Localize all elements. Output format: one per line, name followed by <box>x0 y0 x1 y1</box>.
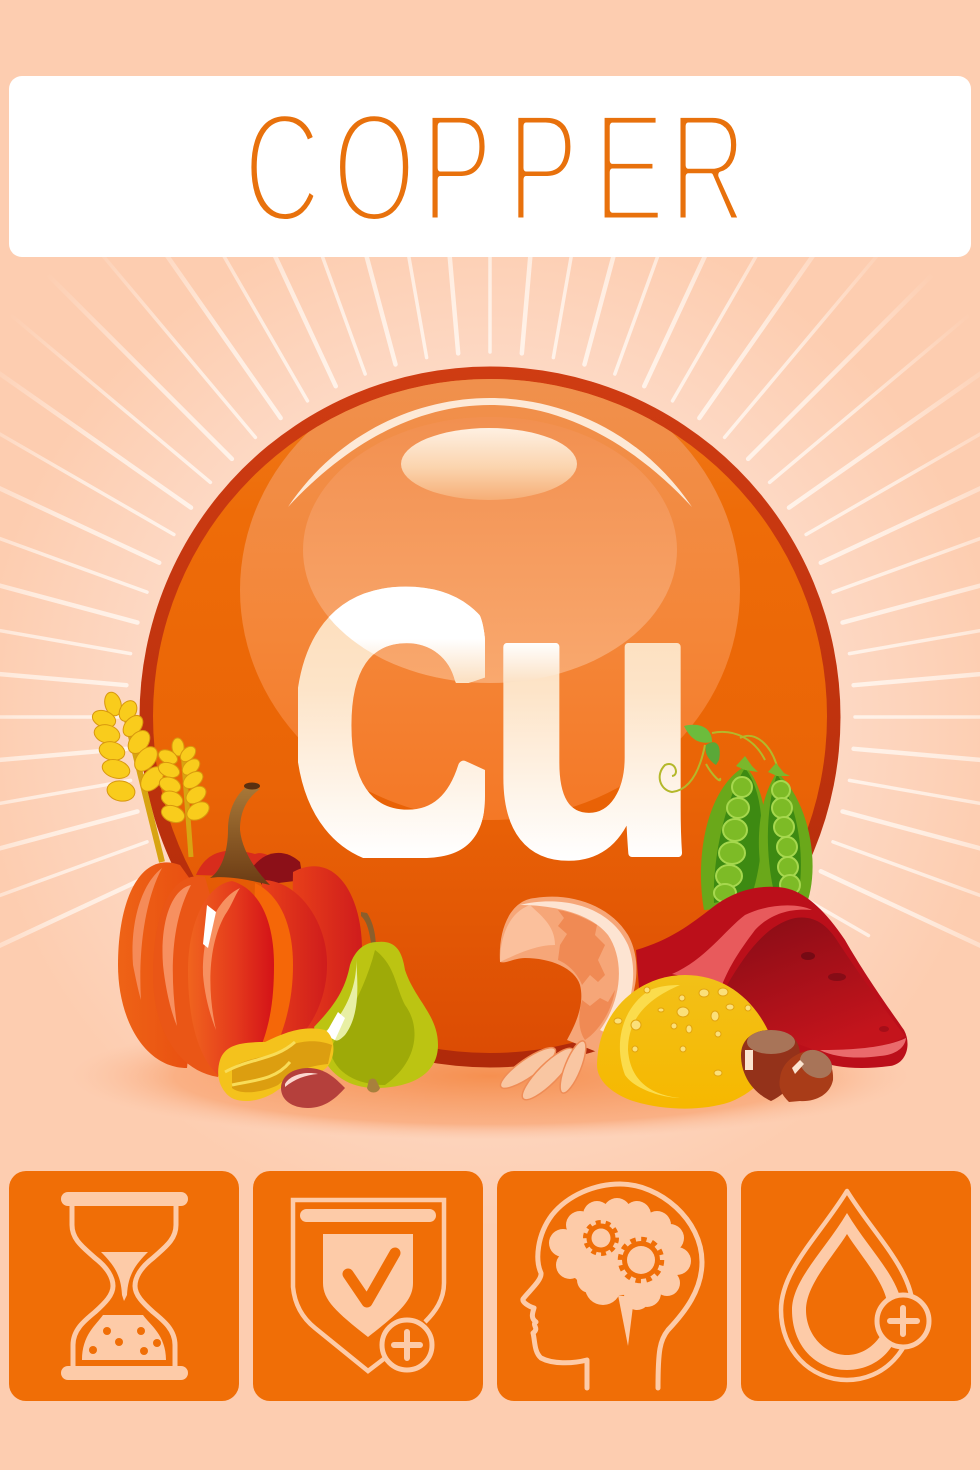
element symbol Cu <box>298 586 682 861</box>
title panel <box>9 76 971 257</box>
card: hourglass (anti-aging) <box>9 1171 239 1401</box>
icon: head with brain and gears <box>523 1184 702 1388</box>
food: sesame bun <box>597 975 773 1109</box>
title: COPPER <box>244 81 747 255</box>
floor shadow <box>70 1012 910 1140</box>
food: hazelnuts <box>741 1030 837 1102</box>
food: shrimp <box>496 897 636 1106</box>
card: blood drop <box>741 1171 971 1401</box>
food: chestnut <box>281 1068 345 1108</box>
food: wheat <box>90 690 212 862</box>
card: shield (immunity) <box>253 1171 483 1401</box>
food: liver <box>636 887 908 1068</box>
sunburst rays <box>0 257 980 948</box>
card: brain (cognition) <box>497 1171 727 1401</box>
food: pear <box>314 912 438 1092</box>
icon: blood drop with plus <box>781 1191 929 1380</box>
icon: hourglass <box>61 1192 188 1380</box>
element symbol Cu: C <box>288 516 511 935</box>
food: peanut <box>218 1028 333 1101</box>
food: peas <box>660 725 813 910</box>
food: pumpkin <box>118 782 362 1077</box>
copper sphere <box>140 360 840 1068</box>
element symbol Cu: u <box>485 501 702 937</box>
icon: shield with plus <box>293 1200 444 1371</box>
